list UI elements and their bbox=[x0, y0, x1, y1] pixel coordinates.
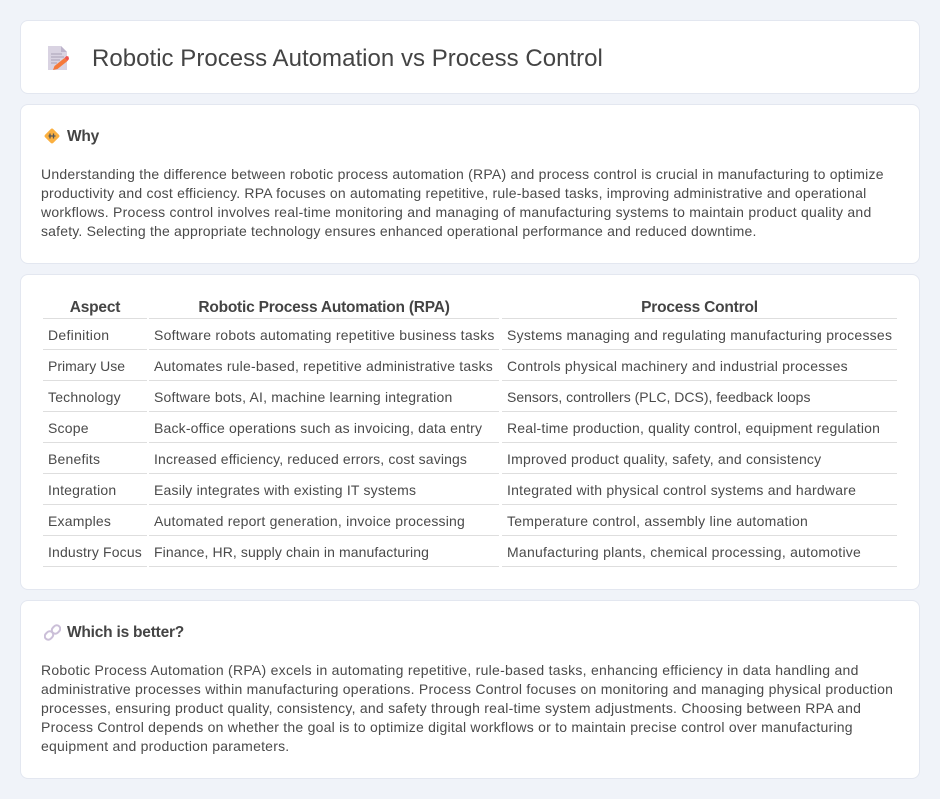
text: Increased efficiency, reduced errors, cost savings bbox=[154, 451, 467, 467]
icon: document with pencil bbox=[48, 46, 69, 70]
text: Back-office operations such as invoicing, data entry bbox=[154, 420, 482, 436]
text: Aspect bbox=[70, 299, 120, 316]
text: productivity and cost efficiency. RPA focuses on automating repetitive, rule-based tasks, improving administrative and operational bbox=[41, 185, 866, 201]
panel: which is better bbox=[20, 600, 920, 779]
text: equipment and production parameters. bbox=[41, 738, 289, 754]
panel: comparison table bbox=[20, 274, 920, 590]
text: Software robots automating repetitive business tasks bbox=[154, 327, 495, 343]
text: Examples bbox=[48, 513, 111, 529]
text: Improved product quality, safety, and consistency bbox=[507, 451, 821, 467]
text: Benefits bbox=[48, 451, 100, 467]
text: Industry Focus bbox=[48, 544, 142, 560]
text: Scope bbox=[48, 420, 89, 436]
icon: warning diamond bbox=[44, 128, 60, 144]
text: Software bots, AI, machine learning integration bbox=[154, 389, 452, 405]
title: Robotic Process Automation vs Process Control bbox=[92, 45, 603, 72]
text: Automated report generation, invoice processing bbox=[154, 513, 465, 529]
comparison table bbox=[43, 299, 897, 567]
text: Automates rule-based, repetitive administrative tasks bbox=[154, 358, 493, 374]
text: Primary Use bbox=[48, 358, 125, 374]
text: Robotic Process Automation (RPA) bbox=[198, 299, 450, 316]
text: Manufacturing plants, chemical processing, automotive bbox=[507, 544, 861, 560]
text: Temperature control, assembly line automation bbox=[507, 513, 808, 529]
text: workflows. Process control involves real-time monitoring and managing of manufacturing systems to maintain product quality and bbox=[41, 204, 872, 220]
text: Systems managing and regulating manufacturing processes bbox=[507, 327, 892, 343]
text: Technology bbox=[48, 389, 121, 405]
text: Understanding the difference between robotic process automation (RPA) and process control is crucial in manufacturing to optimize bbox=[41, 166, 884, 182]
text: Process Control bbox=[641, 299, 758, 316]
text: Process Control depends on whether the goal is to optimize digital workflows or to maintain precise control over manufacturing bbox=[41, 719, 853, 735]
text: processes, ensuring product quality, consistency, and safety through real-time system adjustments. Choosing between RPA and bbox=[41, 700, 861, 716]
text: safety. Selecting the appropriate technology ensures enhanced operational performance and reduced downtime. bbox=[41, 223, 757, 239]
text: Robotic Process Automation (RPA) excels in automating repetitive, rule-based tasks, enhancing efficiency in data handling and bbox=[41, 662, 859, 678]
text block: why bbox=[41, 166, 884, 239]
text: Integrated with physical control systems and hardware bbox=[507, 482, 856, 498]
panel: why bbox=[20, 104, 920, 264]
text: Finance, HR, supply chain in manufacturing bbox=[154, 544, 429, 560]
text: Real-time production, quality control, equipment regulation bbox=[507, 420, 880, 436]
heading: why: Why bbox=[67, 128, 99, 145]
text: Easily integrates with existing IT systems bbox=[154, 482, 416, 498]
heading: which is better: Which is better? bbox=[67, 624, 184, 641]
panel: title header bbox=[20, 20, 920, 94]
text: Definition bbox=[48, 327, 109, 343]
text: Integration bbox=[48, 482, 116, 498]
text: administrative processes within manufacturing operations. Process Control focuses on monitoring and managing physical production bbox=[41, 681, 893, 697]
text block: which is better bbox=[41, 662, 893, 754]
icon: chain link bbox=[44, 624, 61, 641]
text: Controls physical machinery and industrial processes bbox=[507, 358, 848, 374]
text: Sensors, controllers (PLC, DCS), feedback loops bbox=[507, 389, 810, 405]
